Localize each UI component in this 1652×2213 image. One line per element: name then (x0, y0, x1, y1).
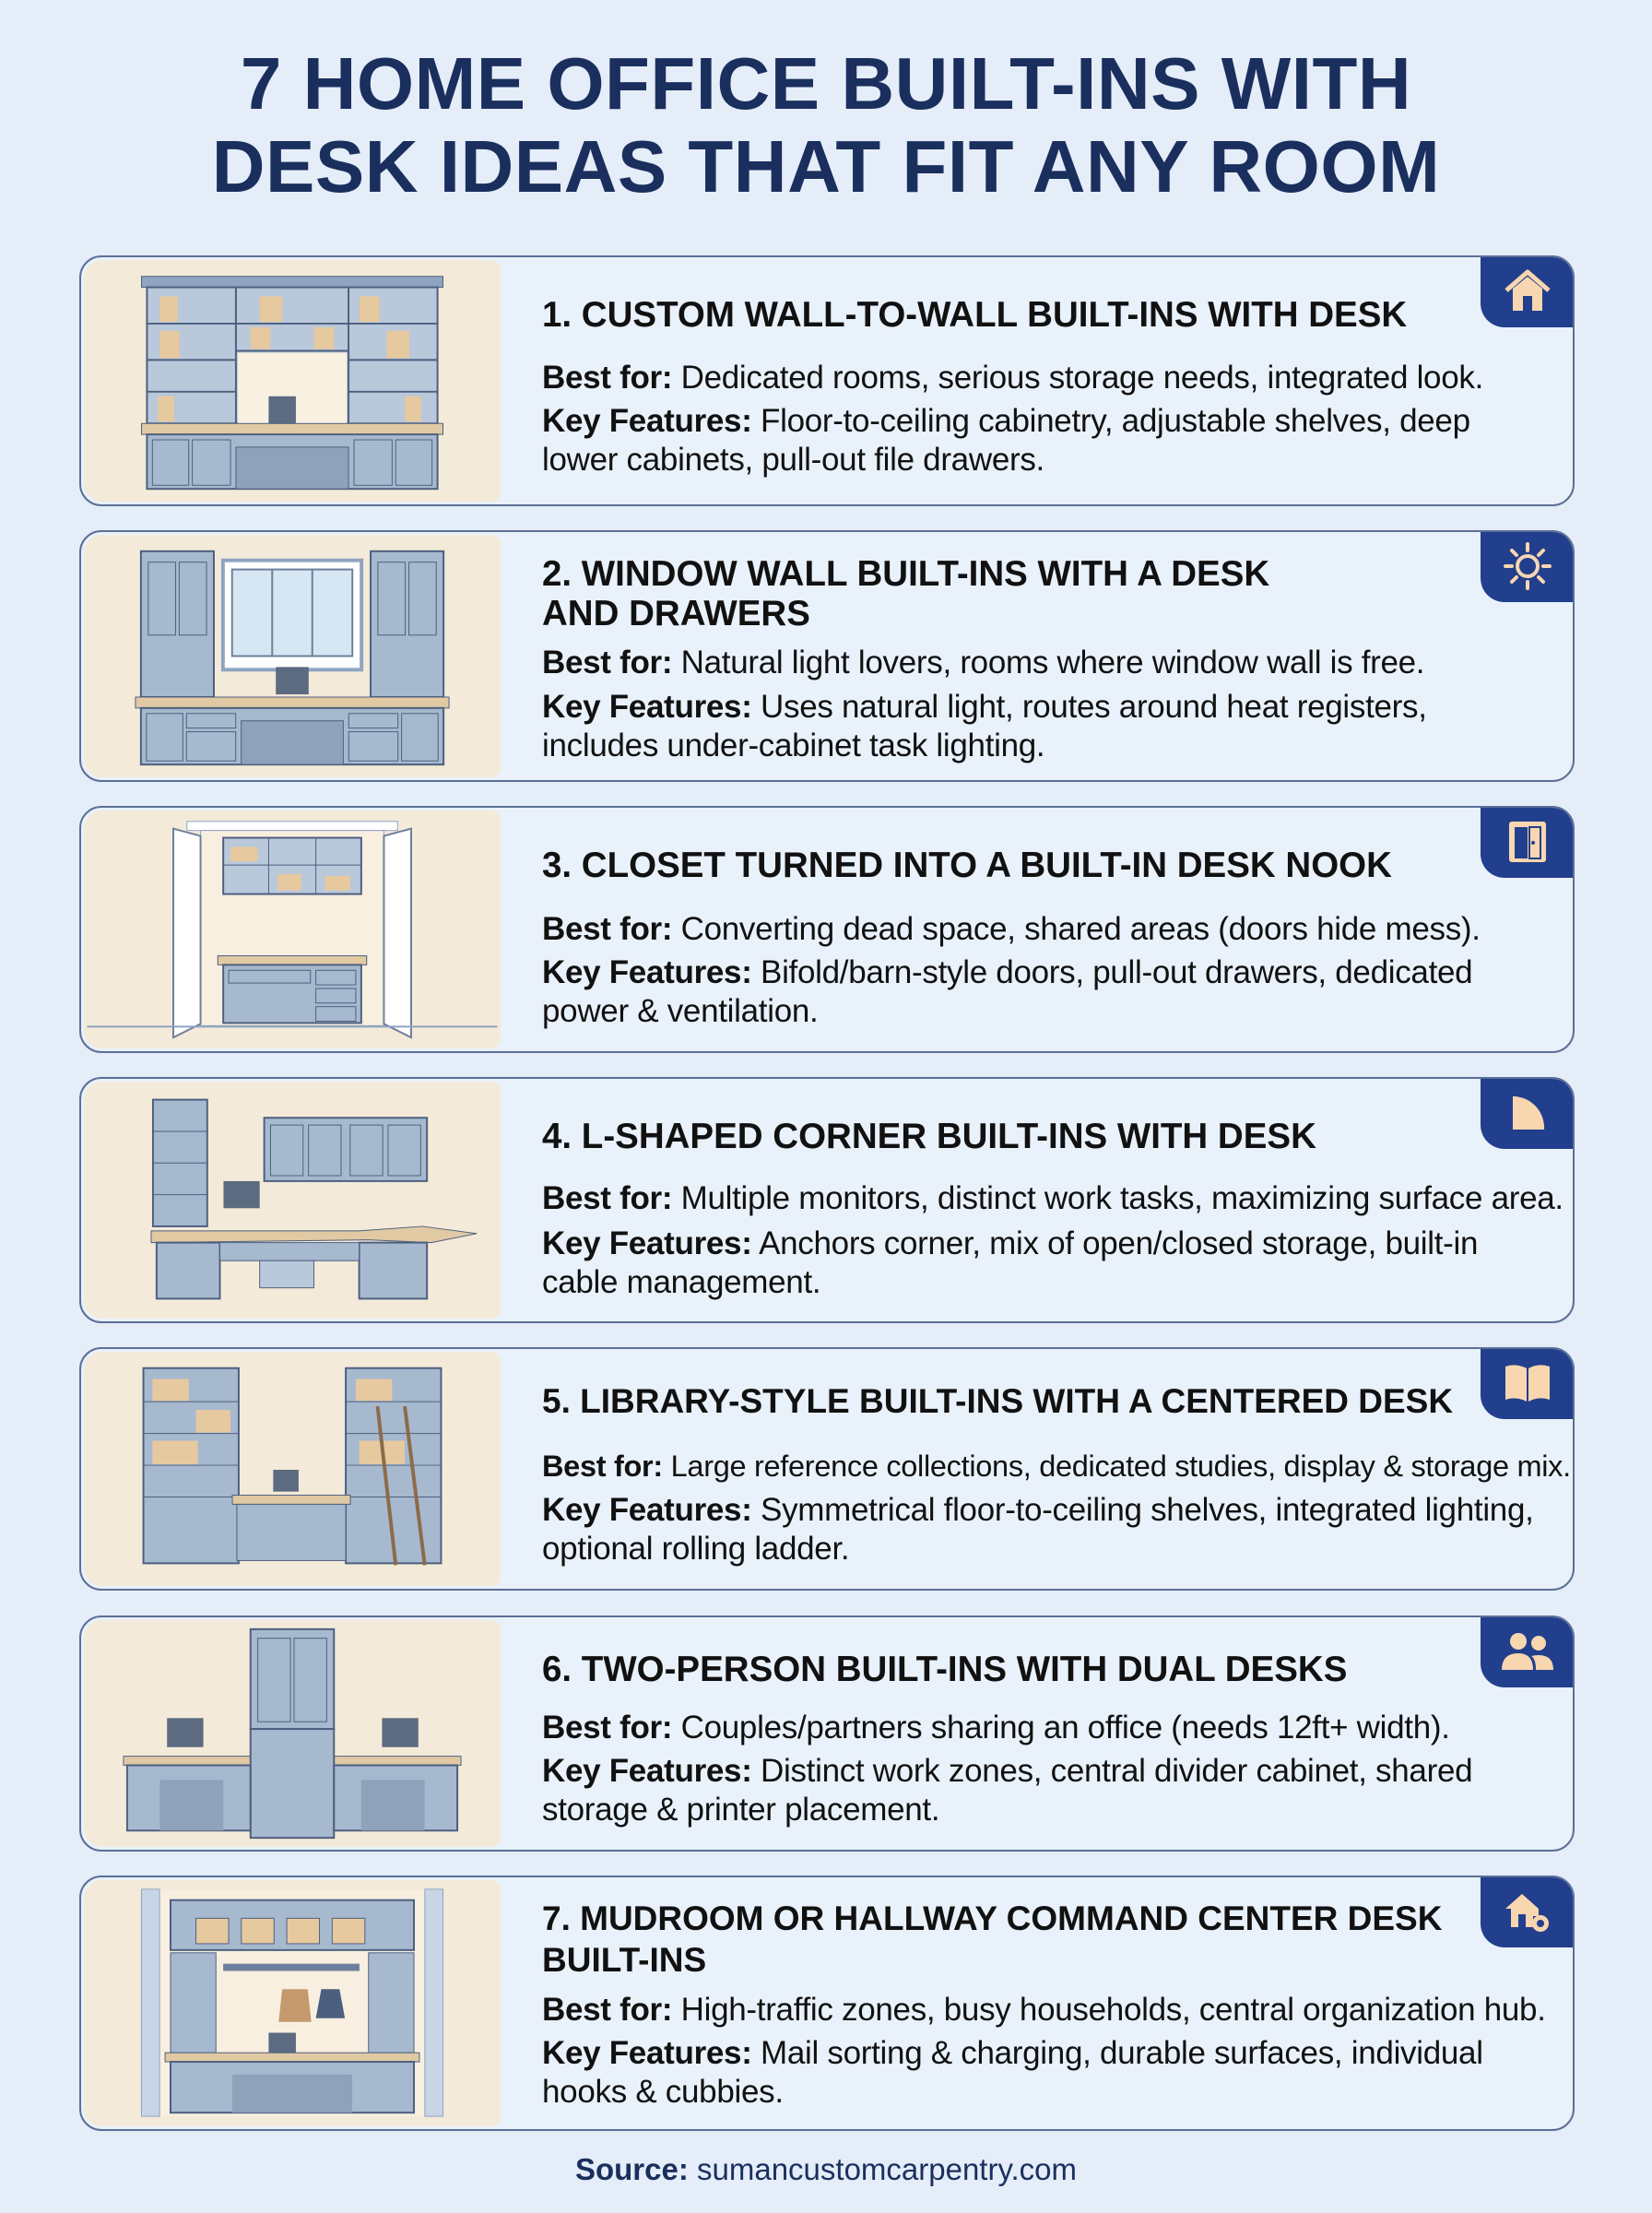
icon: house (1481, 255, 1575, 327)
panel: card 1: Key Features: Floor-to-ceiling cabinetry, adjustable shelves, deep (542, 403, 1470, 439)
title: DESK IDEAS THAT FIT ANY ROOM (212, 125, 1440, 207)
icon: house with gear (1481, 1876, 1575, 1947)
panel: card 4: 4. L-SHAPED CORNER BUILT-INS WITH DESK (542, 1117, 1316, 1156)
text: card 3 (542, 846, 1481, 1029)
panel: card 4: Best for: Multiple monitors, distinct work tasks, maximizing surface area. (542, 1180, 1564, 1216)
panel: card 4 (79, 1077, 1575, 1323)
panel: card 4: Key Features: Anchors corner, mix of open/closed storage, built-in (542, 1225, 1478, 1261)
panel: card 3: Best for: Converting dead space, shared areas (doors hide mess). (542, 911, 1481, 947)
panel: card 4: cable management. (542, 1264, 820, 1300)
illustration: L-shaped corner (84, 1082, 501, 1319)
panel: card 5: optional rolling ladder. (542, 1531, 849, 1567)
illustration: two-person desks (84, 1620, 501, 1847)
panel: card 7 (79, 1876, 1575, 2131)
panel: card 6: Best for: Couples/partners sharing an office (needs 12ft+ width). (542, 1710, 1450, 1746)
panel: card 5: Key Features: Symmetrical floor-to-ceiling shelves, integrated lighting, (542, 1492, 1534, 1528)
panel: card 7: Best for: High-traffic zones, busy households, central organization hub. (542, 1992, 1546, 2028)
illustration: closet nook (84, 811, 501, 1048)
panel: card 2: Key Features: Uses natural light, routes around heat registers, (542, 689, 1427, 725)
icon: book (1481, 1347, 1575, 1419)
text: card 6 (542, 1650, 1472, 1828)
illustration: library style (84, 1352, 501, 1586)
panel: card 6: Key Features: Distinct work zones, central divider cabinet, shared (542, 1753, 1472, 1789)
panel: card 6: storage & printer placement. (542, 1792, 939, 1828)
icon: corner (1481, 1077, 1575, 1149)
icon: door (1481, 806, 1575, 878)
icon: sun (1481, 530, 1575, 602)
icon: people (1481, 1615, 1575, 1687)
title: 7 HOME OFFICE BUILT-INS WITH (241, 42, 1411, 124)
text: card 2 (542, 554, 1427, 763)
text: card 4 (542, 1117, 1564, 1300)
panel: card 2: includes under-cabinet task lighting. (542, 728, 1044, 763)
illustration: mudroom command center (84, 1880, 501, 2126)
panel: card 2 (79, 530, 1575, 782)
panel: card 2: Best for: Natural light lovers, rooms where window wall is free. (542, 645, 1424, 680)
panel: card 7: Key Features: Mail sorting & charging, durable surfaces, individual (542, 2035, 1483, 2071)
panel: card 7: BUILT-INS (542, 1941, 706, 1979)
panel: card 1: lower cabinets, pull-out file drawers. (542, 442, 1044, 478)
panel: card 6 (79, 1615, 1575, 1852)
panel: card 5 (79, 1347, 1575, 1591)
title (212, 42, 1440, 207)
panel: card 3 (79, 806, 1575, 1053)
panel: card 7: hooks & cubbies. (542, 2074, 784, 2110)
panel: card 6: 6. TWO-PERSON BUILT-INS WITH DUAL DESKS (542, 1650, 1347, 1689)
panel: card 3: 3. CLOSET TURNED INTO A BUILT-IN DESK NOOK (542, 846, 1392, 885)
illustration: window wall (84, 535, 501, 777)
panel: card 3: Key Features: Bifold/barn-style doors, pull-out drawers, dedicated (542, 954, 1472, 990)
panel: card 7: 7. MUDROOM OR HALLWAY COMMAND CENTER DESK (542, 1899, 1442, 1937)
panel: card 1 (79, 255, 1575, 506)
panel: card 5: Best for: Large reference collections, dedicated studies, display & storage mix. (542, 1450, 1571, 1483)
illustration: wall-to-wall built-ins (84, 260, 501, 502)
panel: card 2: 2. WINDOW WALL BUILT-INS WITH A DESK (542, 554, 1269, 594)
source footer: Source: sumancustomcarpentry.com (575, 2152, 1077, 2186)
panel: card 1: 1. CUSTOM WALL-TO-WALL BUILT-INS WITH DESK (542, 295, 1407, 335)
panel: card 1: Best for: Dedicated rooms, serious storage needs, integrated look. (542, 360, 1483, 396)
panel: card 5: 5. LIBRARY-STYLE BUILT-INS WITH A CENTERED DESK (542, 1382, 1453, 1420)
text: card 5 (542, 1382, 1571, 1567)
text: card 1 (542, 295, 1483, 478)
panel: card 3: power & ventilation. (542, 993, 818, 1029)
panel: card 2: AND DRAWERS (542, 594, 810, 633)
text: card 7 (542, 1899, 1546, 2110)
